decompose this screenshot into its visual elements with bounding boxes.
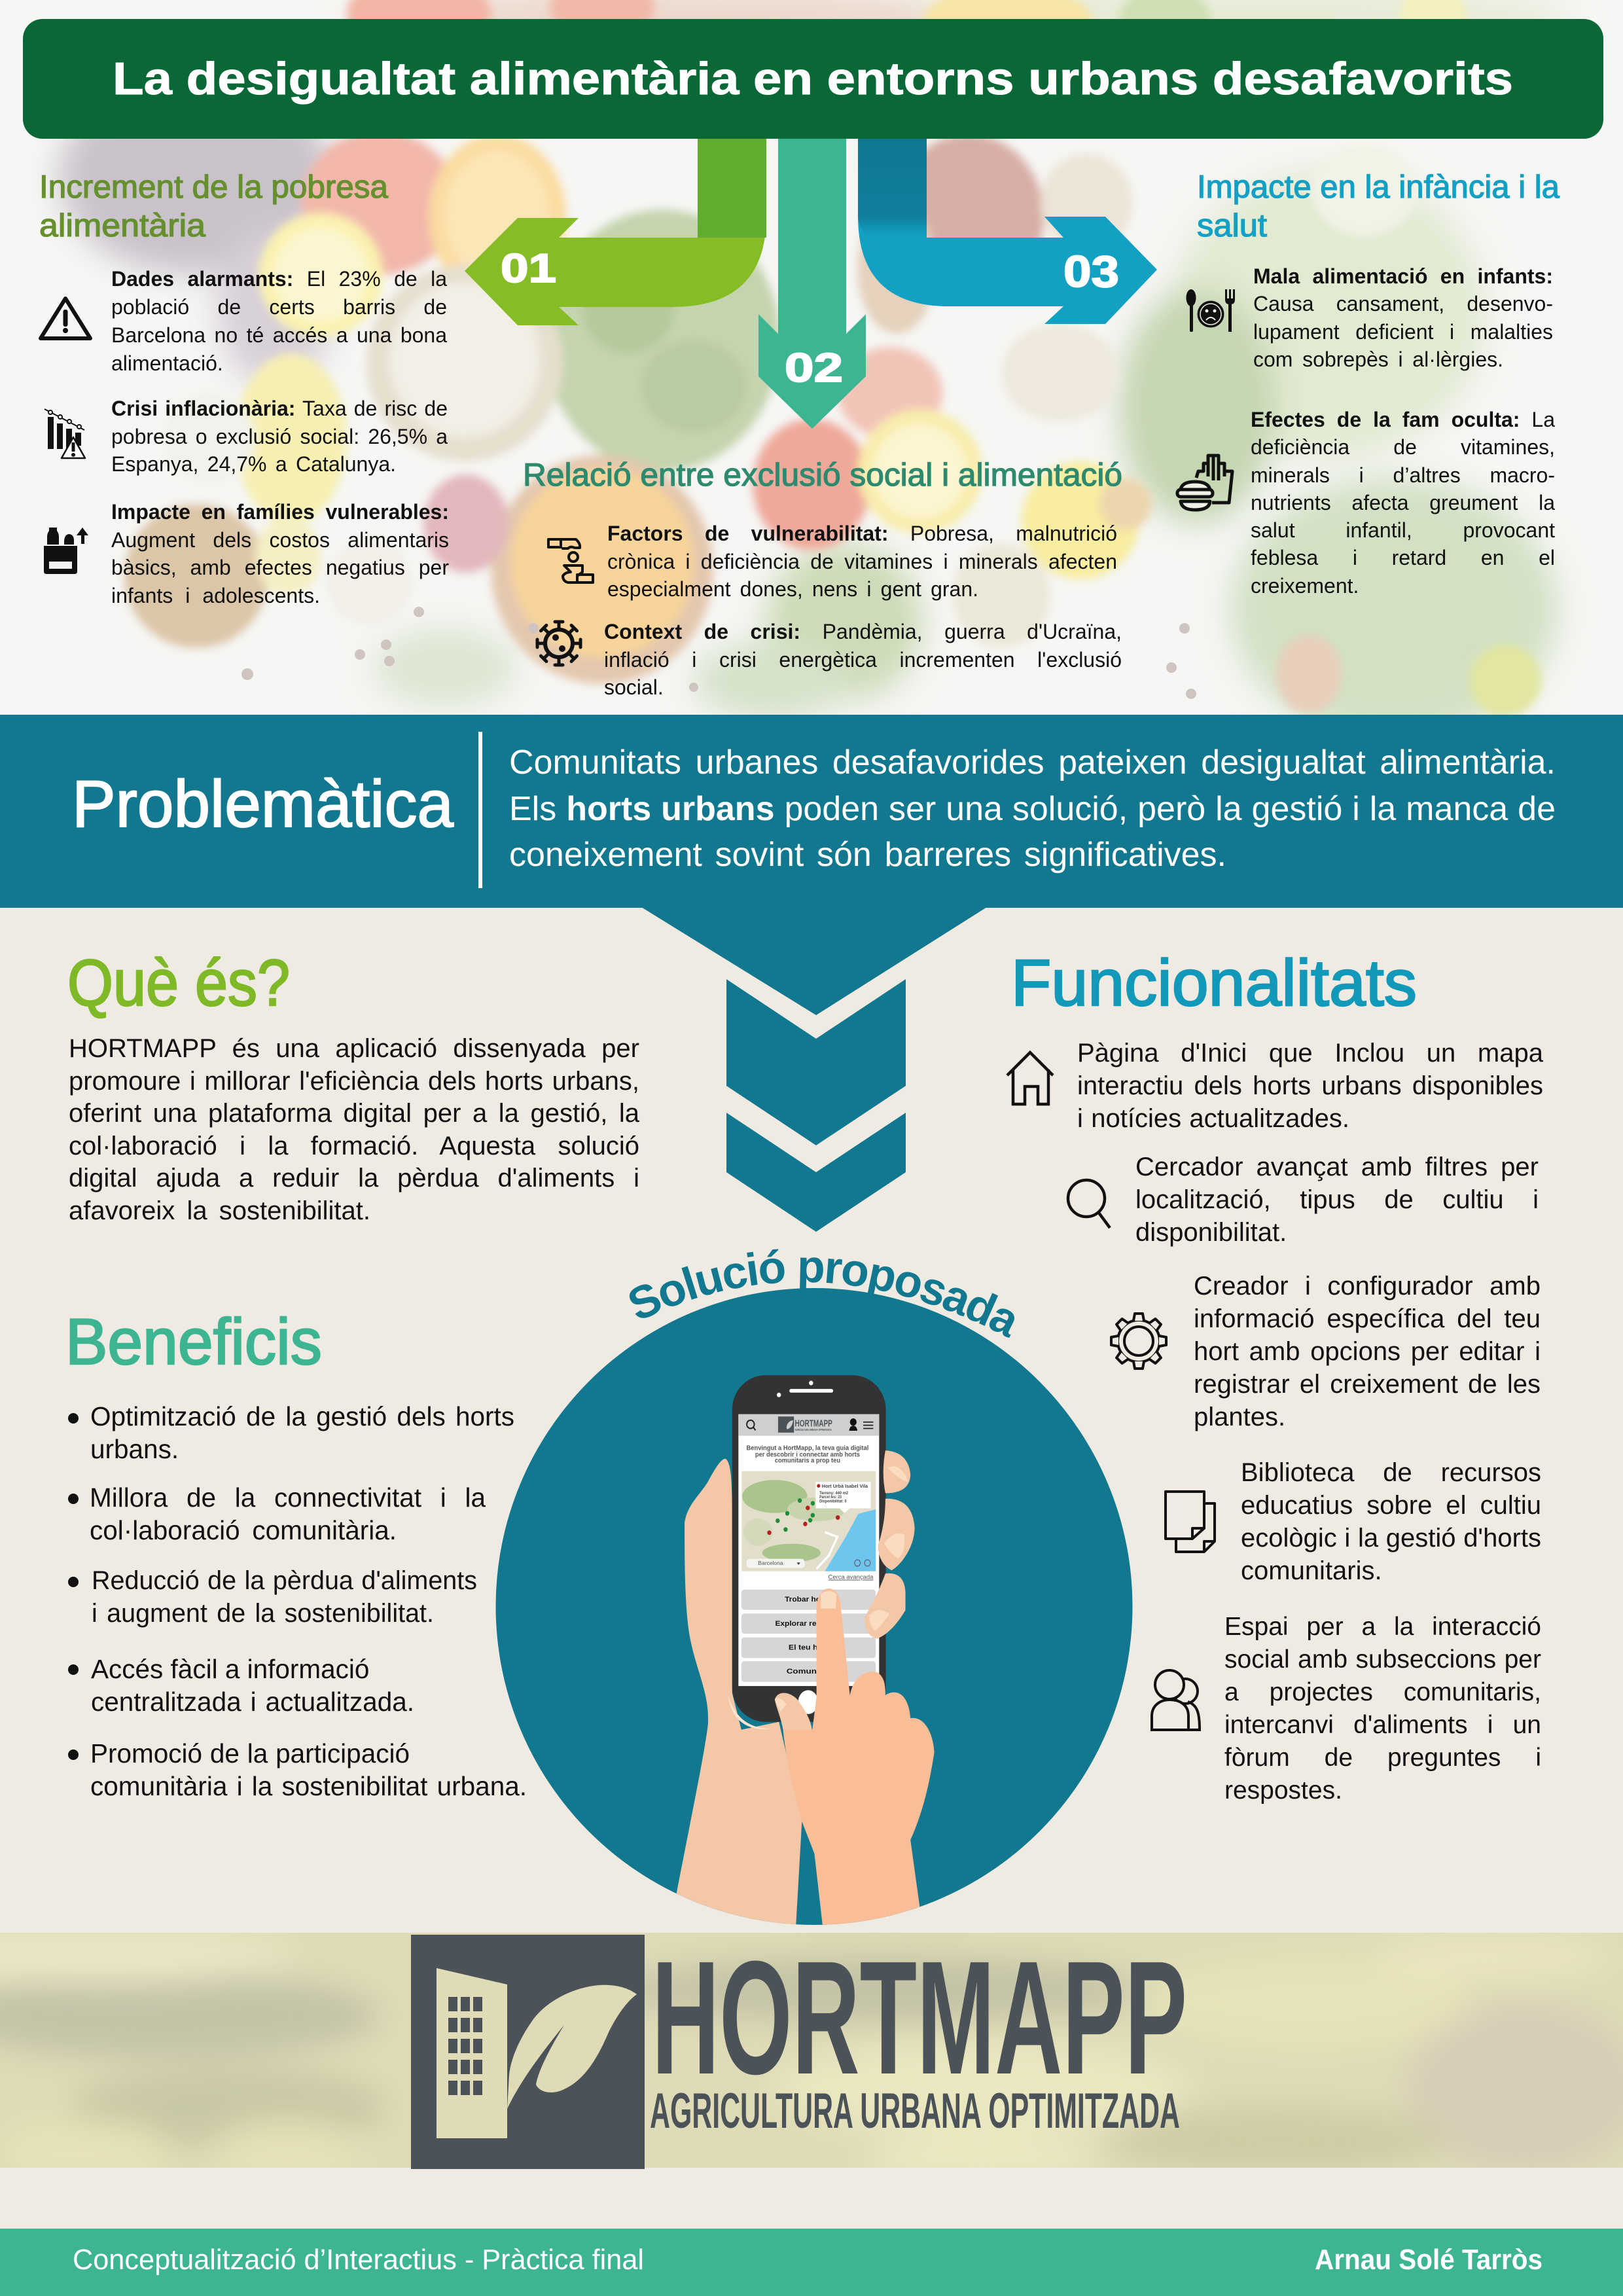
- feature: biblioteca de recursos: [1241, 1456, 1541, 1587]
- text: efectes de la fam oculta: salut infantil, provocant: [1251, 518, 1555, 542]
- text: què és description: HORTMAPP és una aplicació dissenyada per: [69, 1034, 639, 1063]
- text: què és description: digital ajuda a reduir la pèrdua d'aliments i: [69, 1164, 639, 1193]
- benefit list item 2: Millora de la connectivitat i la: [90, 1482, 486, 1513]
- icon: house: [1007, 1052, 1053, 1104]
- text: efectes de la fam oculta: [1251, 406, 1555, 600]
- heading: increment de la pobresa: Increment de la pobresa: [39, 170, 389, 205]
- text: mala alimentació en infants: [1253, 264, 1553, 371]
- text: impacte en famílies vulnerables: Augment dels costos alimentaris: [111, 528, 449, 552]
- feature: creador i configurador: informació específica del teu: [1194, 1304, 1541, 1333]
- benefit list item 4: centralitzada i actualitzada.: [91, 1687, 414, 1717]
- title banner: [23, 19, 1603, 139]
- text: efectes de la fam oculta: nutrients afecta greument la: [1251, 491, 1555, 514]
- text: crisi inflacionària: [111, 397, 448, 476]
- heading: impacte en la infància: Impacte en la infància i la: [1197, 170, 1560, 205]
- benefit list item 5: [68, 1737, 527, 1803]
- text: efectes de la fam oculta: Efectes de la fam oculta: La: [1251, 408, 1555, 431]
- text: factors de vulnerabilitat: crònica i deficiència de vitamines i minerals afecten: [607, 550, 1117, 573]
- map popup: [815, 1482, 871, 1513]
- icon: burger and fries: [1177, 456, 1232, 510]
- icon: hand giving food: [548, 539, 593, 583]
- text: mala alimentació en infants: Mala alimentació en infants:: [1253, 264, 1553, 288]
- text: crisi inflacionària: Crisi inflacionària: Taxa de risc de: [111, 397, 448, 420]
- feature: biblioteca de recursos: comunitaris.: [1241, 1556, 1382, 1585]
- icon: virus: [537, 622, 580, 665]
- band: problemàtica: [0, 715, 1623, 1015]
- icon: gear: [1111, 1314, 1166, 1369]
- footer left text: Conceptualització d’Interactius - Pràctica final: [73, 2244, 644, 2276]
- screen intro text: [746, 1444, 868, 1464]
- map popup: Disponibilitat: 0: [819, 1499, 847, 1504]
- index fingernail: [821, 1590, 836, 1608]
- benefit list item 2: [68, 1481, 486, 1547]
- screen logo and header icons: HORTMAPP: [794, 1418, 832, 1429]
- text: crisi inflacionària: Espanya, 24,7% a Catalunya.: [111, 452, 396, 476]
- screen intro text: Benvingut a HortMapp, la teva guia digital: [746, 1444, 868, 1452]
- advanced search link: Cerca avançada: [829, 1573, 874, 1581]
- feature: creador i configurador: plantes.: [1194, 1403, 1285, 1431]
- thumb: [775, 1693, 812, 1821]
- feature: creador i configurador: Creador i configurador amb: [1194, 1272, 1541, 1300]
- text: efectes de la fam oculta: minerals i d’altres macro-: [1251, 463, 1555, 487]
- text: què és description: col·laboració i la formació. Aquesta solució: [69, 1132, 639, 1160]
- screen buttons: [741, 1590, 876, 1682]
- screen intro text: comunitaris a prop teu: [775, 1457, 840, 1464]
- text: dades alarmants: Barcelona no té accés a una bona: [111, 323, 447, 347]
- icon: search: [1068, 1180, 1110, 1228]
- text: impacte en famílies vulnerables: infants i adolescents.: [111, 584, 320, 607]
- text: context de crisi: Context de crisi: Pandèmia, guerra d'Ucraïna,: [604, 620, 1122, 643]
- heading: relació exclusió social: Relació entre exclusió social i alimentació: [523, 457, 1122, 493]
- arrow number 02: 02: [785, 346, 843, 391]
- feature: espai interacció social: a projectes comunitaris,: [1224, 1678, 1541, 1706]
- highlight under thumb: [728, 1695, 772, 1729]
- benefit list item 5: Promoció de la participació: [90, 1738, 410, 1768]
- icon: sad plate with cutlery: [1186, 289, 1235, 332]
- text: efectes de la fam oculta: deficiència de vitamines,: [1251, 435, 1555, 459]
- feature: espai interacció social: Espai per a la interacció: [1224, 1613, 1541, 1641]
- feature: creador i configurador: [1194, 1270, 1541, 1433]
- screen intro text: per descobrir i connectar amb horts: [755, 1451, 860, 1458]
- feature: pàgina d'inici: i notícies actualitzades.: [1077, 1104, 1349, 1133]
- text: què és description: [69, 1033, 639, 1228]
- arrow number 03: 03: [1063, 247, 1119, 296]
- solution circle: [496, 1288, 1132, 1925]
- fingers behind phone edge: [865, 1450, 915, 1639]
- feature: pàgina d'inici: Pàgina d'Inici que Inclou un mapa: [1077, 1039, 1543, 1067]
- icon: falling chart with warning: [45, 409, 85, 458]
- feature: espai interacció social: fòrum de preguntes i: [1224, 1744, 1541, 1772]
- text: mala alimentació en infants: com sobrepès i al·lèrgies.: [1253, 348, 1503, 371]
- feature: cercador avançat: Cercador avançat amb filtres per: [1135, 1153, 1539, 1181]
- feature: espai interacció social: social amb subseccions per: [1224, 1645, 1541, 1674]
- heading: beneficis: Beneficis: [65, 1305, 322, 1378]
- logo mark: [411, 1935, 645, 2169]
- heading: funcionalitats: Funcionalitats: [1011, 946, 1417, 1020]
- text: dades alarmants: població de certs barris de: [111, 295, 447, 319]
- benefit list item 3: [68, 1564, 477, 1630]
- benefit list item 1: Optimització de la gestió dels horts: [90, 1401, 514, 1431]
- heading: què és: Què és?: [67, 946, 290, 1020]
- benefit list item 3: i augment de la sostenibilitat.: [92, 1599, 434, 1628]
- text: factors de vulnerabilitat: Factors de vulnerabilitat: Pobresa, malnutrició: [607, 522, 1117, 545]
- heading: impacte en la infància: salut: [1197, 208, 1267, 243]
- heading: increment de la pobresa: alimentària: [39, 208, 206, 243]
- screen map: [741, 1471, 876, 1571]
- benefit list item 2: col·laboració comunitària.: [90, 1515, 397, 1545]
- feature: biblioteca de recursos: Biblioteca de recursos: [1241, 1458, 1541, 1487]
- phone: [732, 1375, 886, 1722]
- icon: warning triangle: [41, 298, 90, 338]
- text: mala alimentació en infants: lupament deficient i malalties: [1253, 320, 1553, 344]
- text: factors de vulnerabilitat: especialment dones, nens i gent gran.: [607, 577, 978, 601]
- benefit list item 3: Reducció de la pèrdua d'aliments: [92, 1566, 477, 1595]
- benefit list item 1: urbans.: [90, 1434, 179, 1464]
- footer bar: [0, 2229, 1623, 2296]
- text: dades alarmants: alimentació.: [111, 351, 223, 375]
- logo: hortmapp: [411, 1928, 1187, 2169]
- text: què és description: afavoreix la sostenibilitat.: [69, 1196, 370, 1225]
- screen logo and header icons: [747, 1416, 873, 1433]
- text: què és description: oferint una plataforma digital per a la gestió, la: [69, 1099, 639, 1128]
- map popup: Parcel·les: 23: [819, 1496, 842, 1499]
- benefit list item 4: Accés fàcil a informació: [91, 1654, 369, 1684]
- icon: documents: [1166, 1492, 1215, 1552]
- heading: impacte en la infància: [1197, 170, 1560, 243]
- feature: pàgina d'inici: [1077, 1037, 1543, 1135]
- feature: cercador avançat: localització, tipus de cultiu i: [1135, 1185, 1539, 1214]
- text: problemàtica description: [509, 740, 1556, 878]
- footer author: Arnau Solé Tarròs: [1315, 2244, 1543, 2276]
- screen buttons: Explorar recursos: [775, 1620, 842, 1628]
- text: mala alimentació en infants: Causa cansament, desenvo-: [1253, 292, 1553, 315]
- feature: cercador avançat: [1135, 1151, 1539, 1249]
- arrow 02 teal: [758, 134, 866, 429]
- text: crisi inflacionària: pobresa o exclusió social: 26,5% a: [111, 424, 448, 448]
- screen buttons: Trobar horts: [785, 1596, 830, 1604]
- benefit list item 5: comunitària i la sostenibilitat urbana.: [90, 1771, 527, 1801]
- feature: espai interacció social: intercanvi d'aliments i un: [1224, 1711, 1541, 1739]
- feature: espai interacció social: respostes.: [1224, 1776, 1342, 1804]
- text: impacte en famílies vulnerables: bàsics, amb efectes negatius per: [111, 556, 449, 579]
- feature: creador i configurador: registrar el creixement de les: [1194, 1370, 1541, 1399]
- text: dades alarmants: [111, 267, 448, 375]
- title text: La desigualtat alimentària en entorns urbans desafavorits: [113, 53, 1513, 104]
- screen logo and header icons: AGRICULTURA URBANA OPTIMITZADA: [794, 1428, 832, 1431]
- text: efectes de la fam oculta: feblesa i retard en el: [1251, 546, 1555, 569]
- text: impacte en famílies vulnerables: Impacte en famílies vulnerables:: [111, 500, 449, 524]
- screen map: Barcelona: [758, 1560, 783, 1566]
- map popup: Terreny: 440 m2: [819, 1492, 849, 1496]
- phone held in hands: [658, 1375, 935, 1945]
- feature: biblioteca de recursos: ecològic i la gestió d'horts: [1241, 1524, 1541, 1552]
- feature: creador i configurador: hort amb opcions per editar i: [1194, 1337, 1541, 1366]
- screen buttons: Comunitat: [787, 1668, 830, 1676]
- text: problemàtica description: Comunitats urbanes desafavorides pateixen desigualtat alimentària.: [509, 744, 1556, 781]
- text: problemàtica description: Els horts urbans poden ser una solució, però la gestió i la manca de: [509, 789, 1556, 827]
- screen buttons: El teu hort: [789, 1643, 829, 1652]
- text: context de crisi: inflació i crisi energètica incrementen l'exclusió: [604, 648, 1122, 672]
- feature: cercador avançat: disponibilitat.: [1135, 1218, 1287, 1247]
- text: impacte en famílies vulnerables: [111, 500, 449, 607]
- problemàtica heading: Problemàtica: [72, 768, 454, 841]
- arrow 01 green: [465, 134, 766, 325]
- text: dades alarmants: Dades alarmants: El 23% de la: [111, 267, 447, 291]
- icon: people: [1152, 1670, 1200, 1730]
- logo tagline: AGRICULTURA URBANA OPTIMITZADA: [650, 2083, 1180, 2139]
- benefit list item 4: [68, 1653, 414, 1718]
- chevron arrows: [726, 979, 906, 1232]
- text: problemàtica description: coneixement sovint són barreres significatives.: [509, 836, 1226, 874]
- feature: biblioteca de recursos: educatius sobre el cultiu: [1241, 1491, 1541, 1520]
- logo band: blurred field photo: [0, 1931, 1623, 2186]
- feature: espai interacció social: [1224, 1611, 1541, 1807]
- feature: pàgina d'inici: interactiu dels horts urbans disponibles: [1077, 1071, 1543, 1100]
- benefit list item 1: [68, 1400, 514, 1465]
- left hand: [677, 1458, 802, 1924]
- right hand pointing: [783, 1588, 935, 1945]
- text: context de crisi: [604, 620, 1122, 699]
- icon: grocery bag with rising arrow: [44, 528, 88, 574]
- text: factors de vulnerabilitat: [607, 522, 1117, 601]
- logo wordmark: HORTMAPP: [652, 1928, 1187, 2108]
- map popup: Hort Urbà Isabel Vila: [822, 1483, 868, 1489]
- text: què és description: promoure i millorar l'eficiència dels horts urbans,: [69, 1067, 639, 1096]
- text: efectes de la fam oculta: creixement.: [1251, 574, 1359, 598]
- arrow 03 blue: [858, 134, 1157, 324]
- text: context de crisi: social.: [604, 675, 664, 699]
- heading: increment de la pobresa: [39, 170, 389, 243]
- background photo: vegetables: [0, 0, 1623, 740]
- heading: solució proposada curved: Solució proposada: [630, 1249, 1014, 1338]
- arrow number 01: 01: [501, 246, 556, 291]
